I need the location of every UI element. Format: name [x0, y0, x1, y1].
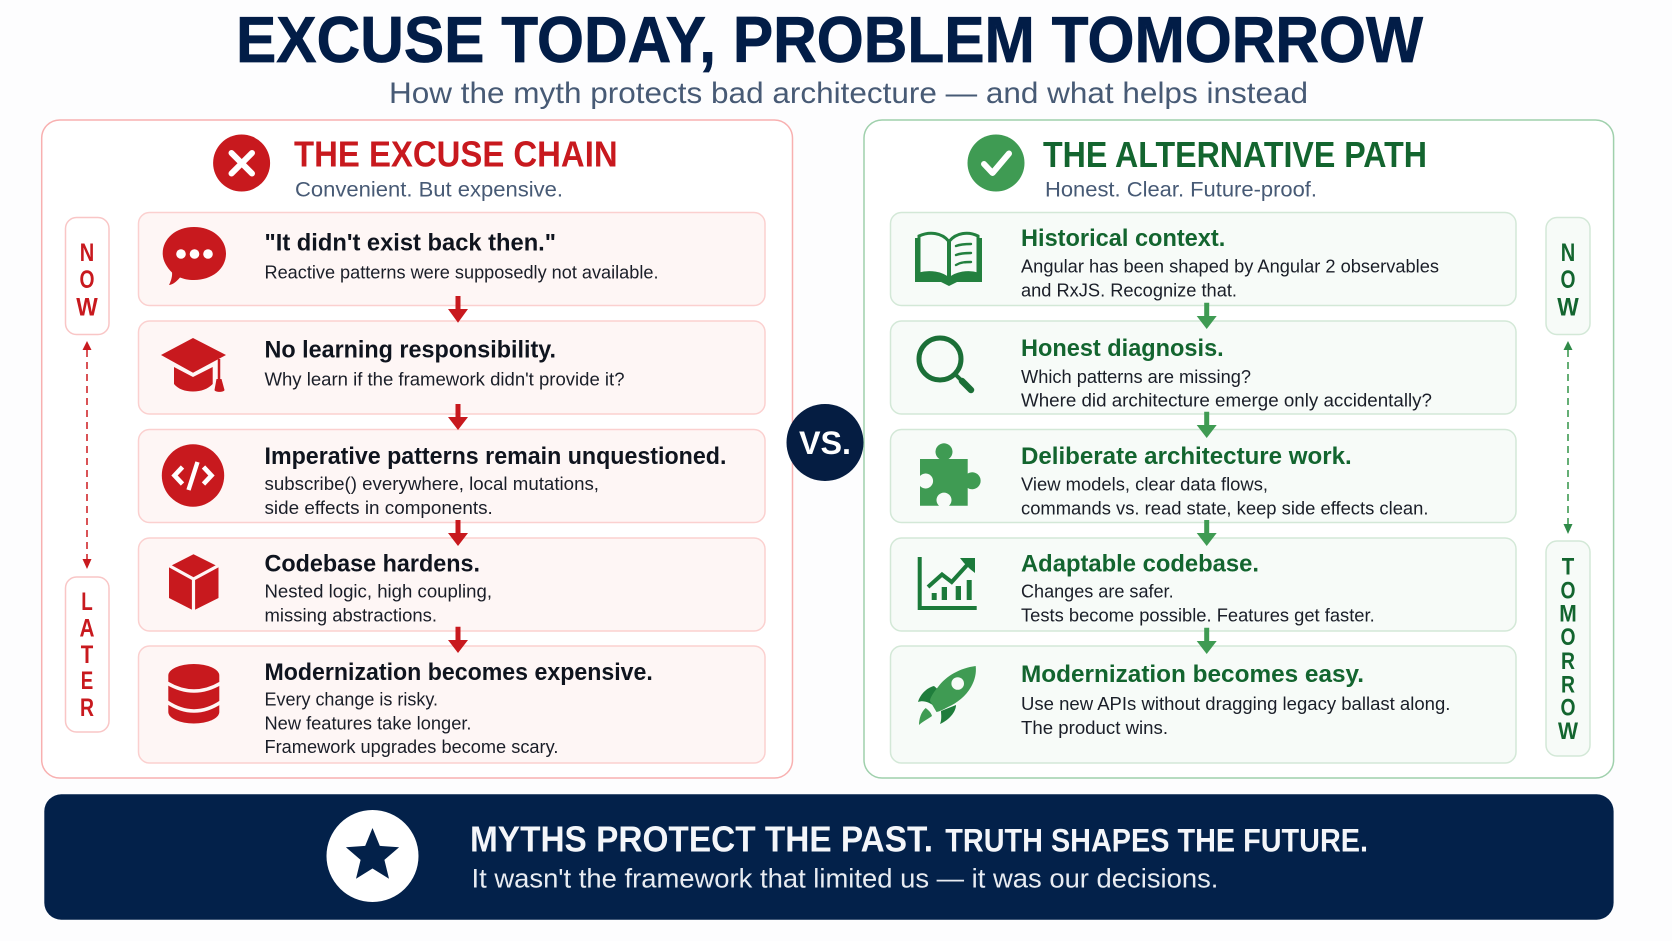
- time label: tomorrow: T: [1562, 553, 1575, 580]
- time label: tomorrow: R: [1561, 671, 1575, 698]
- card text: Which patterns are missing?: [1021, 366, 1251, 387]
- panel tagline: Honest. Clear. Future-proof.: [1045, 178, 1317, 202]
- card text: Changes are safer.: [1021, 581, 1174, 602]
- icon: code circle: [162, 444, 224, 507]
- card text: Every change is risky.: [264, 689, 438, 710]
- card title: Imperative patterns remain unquestioned.: [264, 443, 726, 470]
- arrow: step 4 to 5: [1197, 628, 1217, 654]
- arrow: step 1 to 2: [1197, 303, 1217, 329]
- card text: Why learn if the framework didn't provide it?: [264, 369, 624, 390]
- card: adaptable codebase: Tests become possible. Features get faster.: [1021, 605, 1375, 626]
- time label: now: [66, 218, 109, 334]
- card: no learning responsibility: [138, 321, 765, 414]
- time label: now: O: [1560, 266, 1576, 294]
- icon: magnifying glass: [919, 338, 971, 390]
- card: modernization becomes expensive: [138, 646, 765, 763]
- time label: now: W: [76, 294, 98, 322]
- time label: tomorrow: W: [1558, 718, 1578, 745]
- banner subline: It wasn't the framework that limited us — it was our decisions.: [472, 864, 1218, 894]
- card: historical context: [890, 212, 1516, 306]
- card: historical context: and RxJS. Recognize that.: [1021, 279, 1237, 300]
- card title: Honest diagnosis.: [1021, 335, 1224, 362]
- panel tagline: Convenient. But expensive.: [295, 178, 563, 202]
- time label: now: W: [1557, 294, 1579, 322]
- card: deliberate architecture work: commands vs. read state, keep side effects clean.: [1021, 497, 1428, 518]
- icon: star in circle: [326, 810, 418, 902]
- heading: the alternative path: THE ALTERNATIVE PATH: [1043, 134, 1427, 175]
- time label: later: [66, 577, 109, 732]
- time label: later: L: [81, 588, 93, 616]
- card: modernization becomes expensive: Framework upgrades become scary.: [264, 736, 558, 757]
- card text: Use new APIs without dragging legacy ballast along.: [1021, 693, 1450, 714]
- card text: Reactive patterns were supposedly not available.: [264, 262, 658, 283]
- time label: tomorrow: [1546, 541, 1590, 756]
- card title: No learning responsibility.: [264, 337, 556, 364]
- card: it didn't exist back then: [138, 212, 765, 306]
- panel: the excuse chain: [42, 120, 792, 778]
- time label: tomorrow: R: [1561, 648, 1575, 675]
- icon: green check circle: [968, 134, 1024, 192]
- card: honest diagnosis: Where did architecture emerge only accidentally?: [1021, 390, 1432, 411]
- icon: rocket: [918, 666, 976, 725]
- time label: now: N: [80, 239, 94, 267]
- card text: Nested logic, high coupling,: [264, 581, 492, 602]
- title: EXCUSE TODAY, PROBLEM TOMORROW: [236, 3, 1424, 76]
- arrow: now to tomorrow: [1564, 341, 1572, 534]
- icon: red x circle: [213, 134, 270, 192]
- card: codebase hardens: [138, 538, 765, 631]
- card: codebase hardens: missing abstractions.: [264, 605, 437, 626]
- card title: Deliberate architecture work.: [1021, 443, 1352, 470]
- icon: cube: [168, 554, 220, 611]
- icon: graduation cap: [161, 338, 226, 392]
- card text: subscribe() everywhere, local mutations,: [264, 473, 599, 494]
- time label: later: E: [81, 667, 93, 695]
- card: adaptable codebase: [890, 538, 1516, 631]
- arrow: step 2 to 3: [1197, 412, 1217, 438]
- time label: tomorrow: O: [1560, 577, 1576, 604]
- banner headline: TRUTH SHAPES THE FUTURE.: [945, 823, 1368, 859]
- arrow: step 2 to 3: [448, 404, 468, 430]
- time label: now: N: [1561, 239, 1575, 267]
- icon: growth chart: [918, 557, 977, 610]
- card: modernization becomes easy: The product wins.: [1021, 717, 1168, 738]
- icon: puzzle piece: [920, 443, 981, 506]
- time label: now: O: [80, 266, 94, 294]
- arrow: step 4 to 5: [448, 627, 468, 653]
- card title: Adaptable codebase.: [1021, 550, 1259, 577]
- vs badge: [786, 404, 864, 481]
- time label: tomorrow: O: [1560, 695, 1576, 722]
- time label: later: A: [80, 614, 94, 642]
- time label: tomorrow: O: [1560, 624, 1576, 651]
- card title: Modernization becomes expensive.: [264, 659, 653, 686]
- card text: View models, clear data flows,: [1021, 474, 1268, 495]
- subtitle: How the myth protects bad architecture — and what helps instead: [389, 77, 1308, 110]
- card title: Historical context.: [1021, 225, 1225, 252]
- card: modernization becomes expensive: New features take longer.: [264, 712, 472, 733]
- card: imperative patterns: [138, 430, 765, 522]
- card: imperative patterns: side effects in components.: [264, 497, 493, 518]
- banner: closing message: [44, 794, 1614, 920]
- icon: database: [167, 664, 221, 724]
- card text: Angular has been shaped by Angular 2 observables: [1021, 255, 1439, 276]
- arrow: now to later: [82, 341, 92, 569]
- card title: Modernization becomes easy.: [1021, 661, 1364, 688]
- time label: now: [1546, 218, 1590, 334]
- panel: the alternative path: [864, 120, 1614, 778]
- card: deliberate architecture work: [890, 430, 1516, 522]
- icon: speech bubble: [163, 227, 226, 285]
- icon: open book: [915, 233, 982, 286]
- time label: later: R: [80, 694, 94, 722]
- arrow: step 3 to 4: [1197, 520, 1217, 546]
- banner headline: MYTHS PROTECT THE PAST.: [470, 819, 933, 860]
- time label: later: T: [81, 641, 93, 669]
- time label: tomorrow: M: [1559, 601, 1577, 628]
- vs badge: VS.: [799, 425, 851, 461]
- arrow: step 1 to 2: [448, 296, 468, 323]
- card: honest diagnosis: [890, 321, 1516, 414]
- card title: Codebase hardens.: [264, 550, 480, 577]
- card: modernization becomes easy: [890, 646, 1516, 763]
- card title: "It didn't exist back then.": [264, 230, 556, 257]
- banner headline: [470, 819, 1368, 860]
- arrow: step 3 to 4: [448, 520, 468, 546]
- heading: the excuse chain: THE EXCUSE CHAIN: [294, 134, 618, 175]
